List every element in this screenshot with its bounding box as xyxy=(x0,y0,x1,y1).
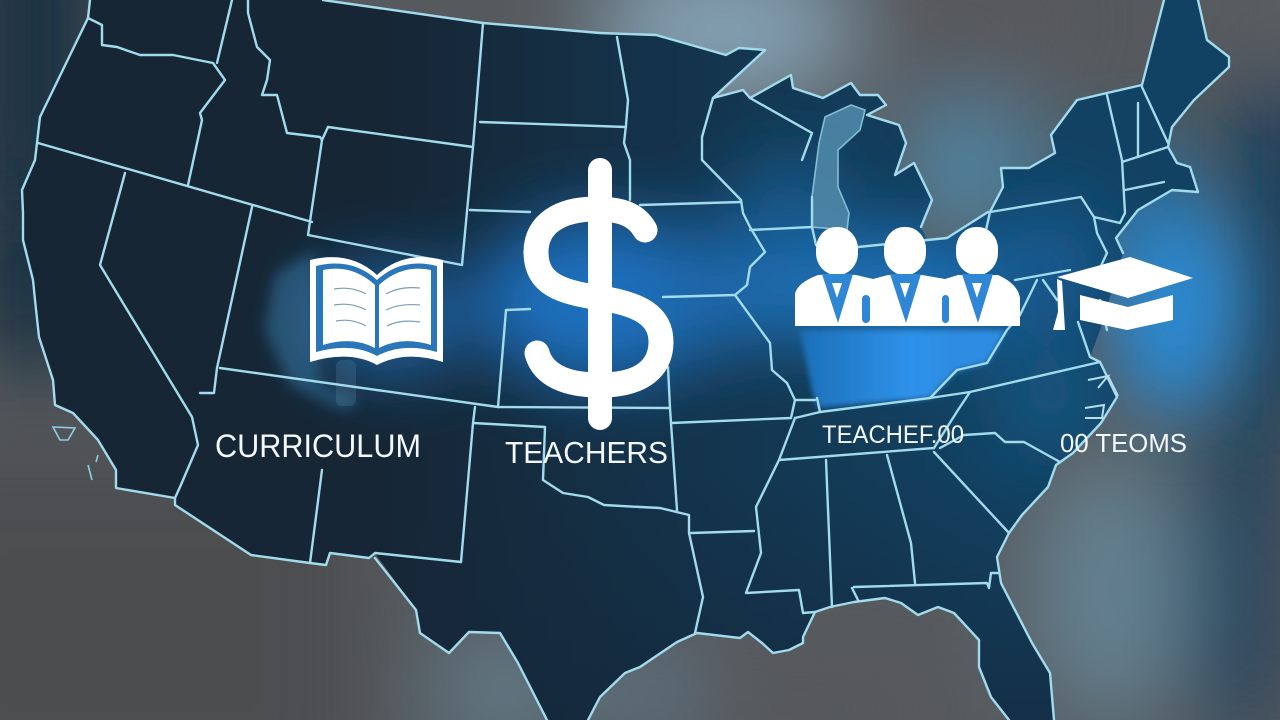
ocean glow xyxy=(1050,140,1245,415)
great lakes: Lake Michigan xyxy=(812,105,865,230)
label: outcomes: 00 TEOMS xyxy=(1060,428,1187,458)
icon: dollar sign xyxy=(536,170,661,418)
icon: open book xyxy=(310,257,443,365)
translucent haze under book xyxy=(265,250,360,410)
bright region below people xyxy=(800,330,1006,408)
label: curriculum: CURRICULUM xyxy=(215,428,421,464)
icon: graduation cap xyxy=(1053,257,1193,330)
outer banks detail xyxy=(1085,376,1118,418)
label: teacher figure: TEACHEF.00 xyxy=(822,421,964,449)
icon: three people xyxy=(795,227,1020,326)
channel islands xyxy=(53,427,98,480)
label: teachers: TEACHERS xyxy=(505,435,668,470)
